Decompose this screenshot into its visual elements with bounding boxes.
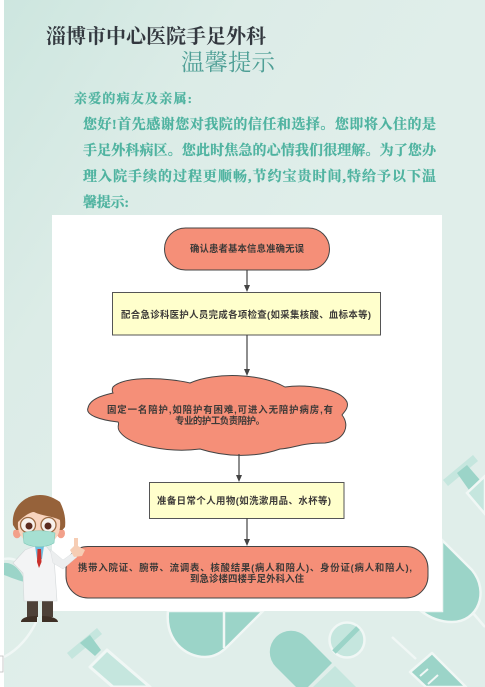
salutation: 亲爱的病友及亲属: bbox=[74, 91, 192, 106]
tie bbox=[37, 549, 42, 568]
step 4: personal items bbox=[150, 482, 344, 518]
face bbox=[18, 512, 60, 545]
step 1: confirm patient information: 确认患者基本信息准确无误 bbox=[190, 243, 305, 254]
shoes bbox=[21, 616, 58, 622]
face mask bbox=[23, 531, 55, 547]
paragraph: 您好!首先感谢您对我院的信任和选择。您即将入住的是 bbox=[83, 116, 436, 133]
decoration: bottom-right syringe bbox=[392, 637, 466, 687]
paragraph: 馨提示: bbox=[83, 194, 129, 211]
decoration: bottom capsule bbox=[270, 631, 356, 687]
ears bbox=[13, 530, 65, 538]
decoration: corner mark bbox=[0, 656, 3, 672]
hair bbox=[13, 495, 65, 533]
flowchart panel bbox=[52, 215, 442, 611]
arrow 3 bbox=[236, 454, 242, 482]
arrow 1 bbox=[244, 270, 250, 292]
decoration: center capsule bbox=[168, 611, 263, 657]
step 5: documents and check-in bbox=[66, 546, 428, 598]
title: 淄博市中心医院手足外科 bbox=[46, 24, 266, 48]
hand bbox=[70, 538, 85, 557]
flowchart bbox=[66, 228, 428, 598]
subtitle: 温馨提示 bbox=[181, 50, 276, 75]
paragraph: 理入院手续的过程更顺畅,节约宝贵时间,特给予以下温 bbox=[83, 168, 436, 185]
step 2: examinations: 配合急诊科医护人员完成各项检查(如采集核酸、血标本等) bbox=[121, 309, 371, 320]
greeting text block bbox=[74, 91, 438, 211]
arm bbox=[50, 549, 77, 569]
step 5: documents and check-in: 携带入院证、腕带、流调表、核酸结果(病人和陪人)、身份证(病人和陪人), bbox=[78, 562, 412, 573]
decoration: round tablet bbox=[330, 622, 364, 658]
step 5: documents and check-in: 到急诊楼四楼手足外科入住 bbox=[190, 573, 305, 584]
decoration: bottom-left syringe bbox=[67, 628, 150, 687]
glasses bbox=[20, 518, 56, 532]
step 1: confirm patient information bbox=[164, 228, 330, 270]
step 4: personal items: 准备日常个人用物(如洗漱用品、水杯等) bbox=[157, 495, 331, 506]
step 2: examinations bbox=[112, 292, 380, 335]
arrow 2 bbox=[244, 335, 250, 376]
arrow 4 bbox=[244, 518, 250, 546]
paragraph: 手足外科病区。您此时焦急的心情我们很理解。为了您办 bbox=[83, 142, 438, 159]
coat bbox=[13, 546, 57, 601]
decoration: left tube loop bbox=[4, 559, 37, 657]
decoration: right large capsule bbox=[421, 540, 485, 627]
step 3: companion cloud: 专业的护工负责陪护。 bbox=[175, 415, 265, 426]
decoration: top-right syringe bbox=[443, 455, 485, 514]
shirt bbox=[35, 546, 44, 559]
step 3: companion cloud bbox=[88, 376, 347, 455]
paragraph bbox=[83, 116, 438, 211]
legs bbox=[27, 600, 53, 617]
icon: doctor with face mask bbox=[13, 495, 85, 622]
step 3: companion cloud: 固定一名陪护,如陪护有困难,可进入无陪护病房,有 bbox=[107, 404, 333, 415]
background medical decorations bbox=[0, 455, 485, 687]
